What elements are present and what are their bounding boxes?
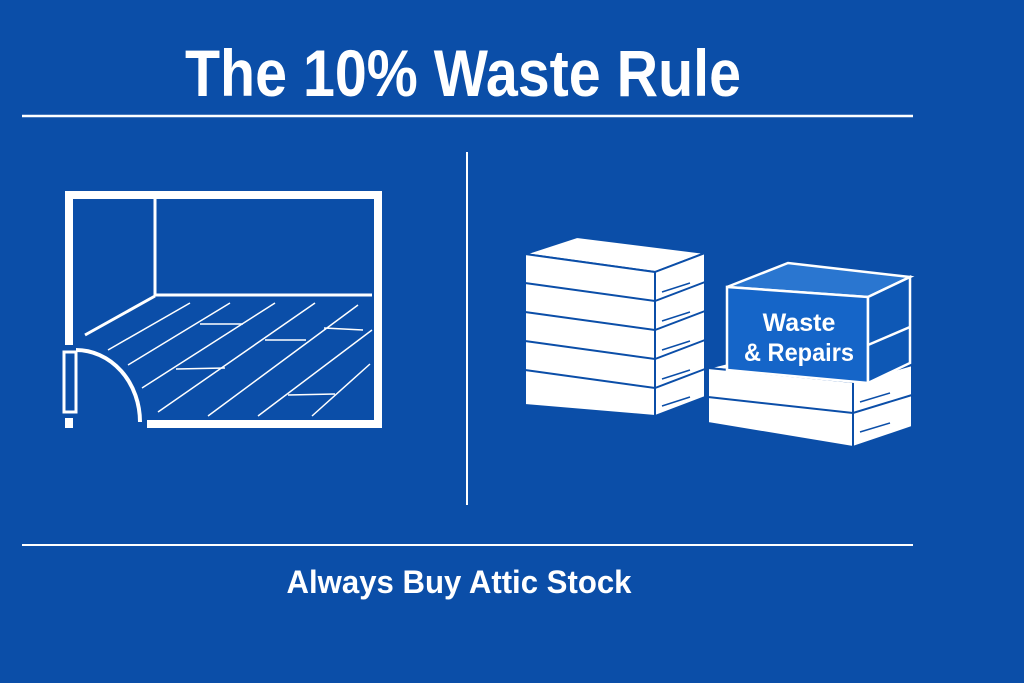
boxes stack left <box>525 237 705 416</box>
title: The 10% Waste Rule <box>185 36 741 110</box>
footer caption: Always Buy Attic Stock <box>286 564 632 600</box>
waste & repairs box: Waste <box>763 309 835 337</box>
floor plan icon <box>64 195 378 428</box>
waste & repairs box <box>727 263 910 383</box>
waste & repairs box: & Repairs <box>744 339 854 367</box>
boxes stack right <box>708 355 912 447</box>
